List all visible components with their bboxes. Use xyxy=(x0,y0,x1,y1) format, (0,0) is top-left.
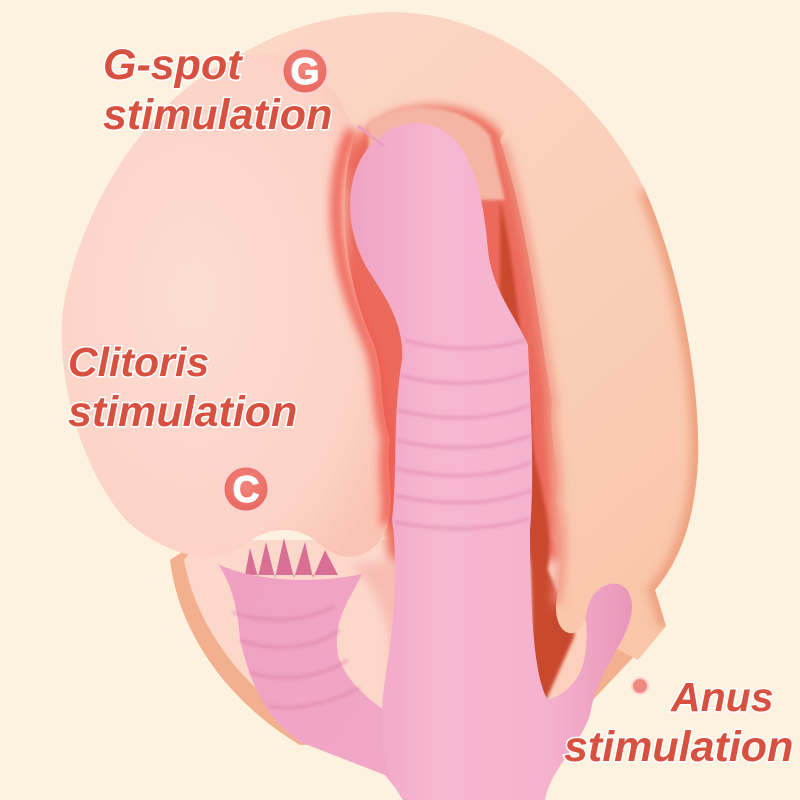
label: Clitoris stimulation xyxy=(68,339,297,436)
cavity glow xyxy=(345,106,560,560)
icon: G badge: G xyxy=(291,51,319,92)
right lobe edge shading xyxy=(645,190,698,626)
dark inner wall xyxy=(500,200,575,725)
label: G-spot stimulation: stimulation xyxy=(103,91,332,139)
icon: C badge xyxy=(223,466,269,512)
right lobe xyxy=(496,128,698,634)
label: Clitoris stimulation: Clitoris xyxy=(68,339,209,385)
icon: C badge: C xyxy=(233,469,259,510)
icon: G badge xyxy=(282,48,328,94)
outer body with cavity xyxy=(150,12,698,725)
label: Anus stimulation: Anus xyxy=(670,674,774,720)
label: G-spot stimulation: G-spot xyxy=(103,41,243,89)
label: Anus stimulation: stimulation xyxy=(564,723,793,771)
label: Clitoris stimulation: stimulation xyxy=(68,388,297,436)
front lobe xyxy=(62,54,391,557)
label: G-spot stimulation xyxy=(103,41,332,139)
label: Anus stimulation xyxy=(564,674,793,771)
lower lobe xyxy=(170,540,640,745)
icon: anus point marker xyxy=(632,678,648,694)
cavity arch xyxy=(368,107,505,200)
main shaft xyxy=(350,123,632,800)
bristle head xyxy=(218,538,405,800)
